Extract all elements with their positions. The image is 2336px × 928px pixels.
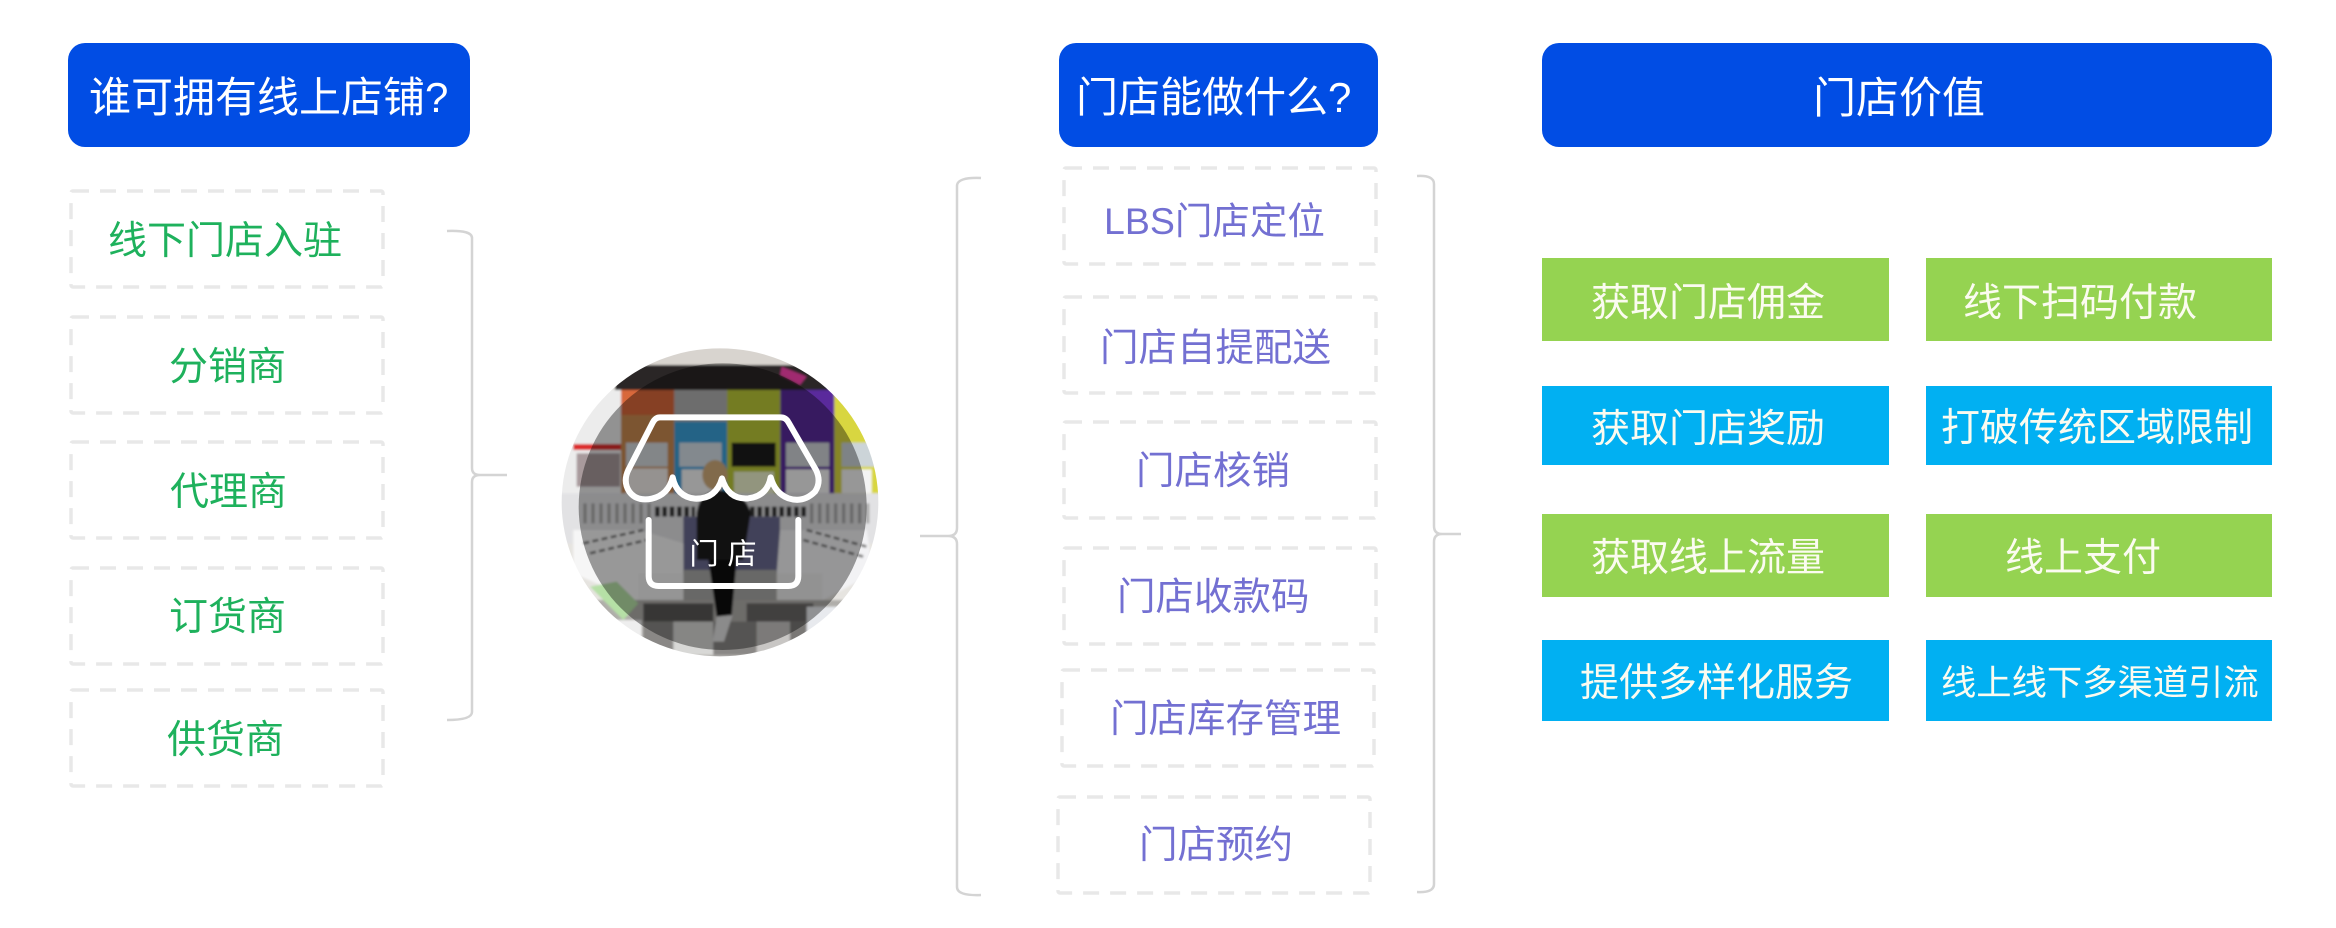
value cell: offline QR payment xyxy=(1926,258,2272,341)
panel item: inventory management xyxy=(1060,668,1376,768)
icon: storefront outline xyxy=(626,417,819,586)
panel item: payment code: 门店收款码 xyxy=(1117,576,1310,619)
value cell: diverse services: 提供多样化服务 xyxy=(1580,662,1853,705)
panel item: LBS location xyxy=(1062,166,1378,266)
panel item: ordering merchant xyxy=(69,566,385,666)
value cell: online traffic: 获取线上流量 xyxy=(1591,537,1825,580)
value cell: store commission: 获取门店佣金 xyxy=(1591,282,1825,325)
heading: who can own an online store xyxy=(68,43,470,147)
bracket: left group to store xyxy=(447,230,507,722)
value cell: store rewards xyxy=(1542,386,1889,465)
heading: what a store can do xyxy=(1059,43,1378,147)
icon: store photo circle with storefront glyph xyxy=(562,348,878,656)
panel item: supplier: 供货商 xyxy=(167,719,284,762)
value cell: store commission xyxy=(1542,258,1889,341)
value cell: break regional limits: 打破传统区域限制 xyxy=(1941,407,2253,450)
value cell: offline QR payment: 线下扫码付款 xyxy=(1963,282,2197,325)
panel item: payment code xyxy=(1062,546,1378,646)
value cell: store rewards: 获取门店奖励 xyxy=(1591,408,1825,451)
heading: store value: 门店价值 xyxy=(1813,75,1985,123)
panel item: inventory management: 门店库存管理 xyxy=(1110,698,1341,741)
value cell: break regional limits xyxy=(1926,386,2272,465)
store label: 门店 xyxy=(689,538,765,571)
value cell: diverse services xyxy=(1542,640,1889,721)
value cell: online payment: 线上支付 xyxy=(2005,537,2161,580)
panel item: offline store onboarding: 线下门店入驻 xyxy=(108,220,342,263)
panel item: LBS location: LBS门店定位 xyxy=(1104,200,1325,242)
panel item: agent xyxy=(69,440,385,540)
panel item: agent: 代理商 xyxy=(170,471,287,514)
bracket: store to capabilities xyxy=(920,176,981,896)
bracket: capabilities to value xyxy=(1417,174,1461,894)
value cell: multichannel traffic: 线上线下多渠道引流 xyxy=(1941,664,2259,703)
panel item: reservation xyxy=(1056,795,1372,895)
panel item: verification xyxy=(1062,420,1378,520)
panel item: self pickup delivery: 门店自提配送 xyxy=(1100,327,1331,370)
heading: store value xyxy=(1542,43,2272,147)
value cell: online traffic xyxy=(1542,514,1889,597)
panel item: verification: 门店核销 xyxy=(1136,450,1290,493)
heading: what a store can do: 门店能做什么? xyxy=(1076,74,1351,121)
icon: person in the store xyxy=(697,460,751,642)
panel item: supplier xyxy=(69,688,385,788)
panel item: distributor: 分销商 xyxy=(169,346,286,389)
panel item: self pickup delivery xyxy=(1062,295,1378,395)
panel item: ordering merchant: 订货商 xyxy=(169,596,286,639)
heading: who can own an online store: 谁可拥有线上店铺? xyxy=(89,74,448,121)
panel item: distributor xyxy=(69,315,385,415)
panel item: reservation: 门店预约 xyxy=(1139,824,1293,867)
value cell: multichannel traffic xyxy=(1926,640,2272,721)
value cell: online payment xyxy=(1926,514,2272,597)
panel item: offline store onboarding xyxy=(69,189,385,289)
